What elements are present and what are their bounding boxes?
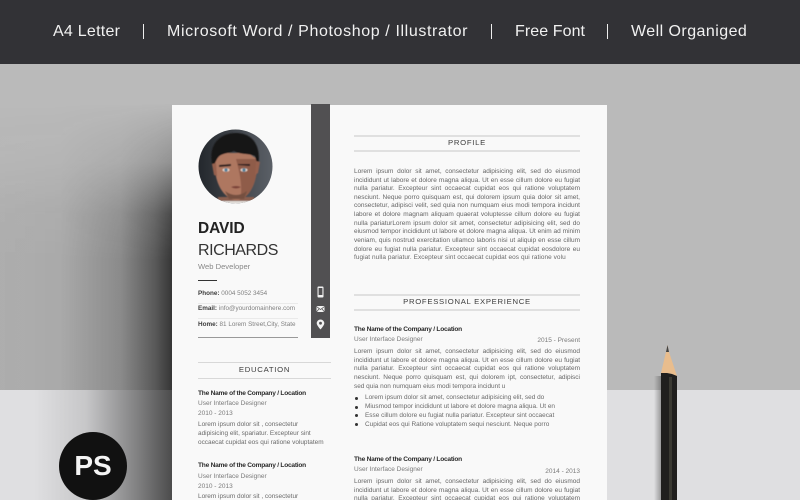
education entry 1: adipisicing elit, spariatur. Excepteur sint: [198, 430, 311, 437]
education entry 1: 2010 - 2013: [198, 410, 233, 417]
experience entry 2: The Name of the Company / Location: [354, 456, 462, 463]
dark sidebar strip: [311, 104, 330, 338]
education entry 2: The Name of the Company / Location: [198, 462, 306, 469]
icon: phone: [318, 286, 324, 298]
contact: phone: Phone: 0004 5052 3454: [198, 290, 267, 297]
lower paper shadow: [0, 390, 172, 500]
banner item: software: Microsoft Word / Photoshop / Illustrator: [167, 23, 468, 40]
education entry 2: 2010 - 2013: [198, 483, 233, 490]
portrait photo: [198, 130, 272, 204]
banner item: Free Font: Free Font: [515, 23, 585, 40]
experience entry 1: User Interface Designer: [354, 336, 423, 343]
experience entry 2: incididunt ut labore et dolore magna aliqua. Ut en esse cillum dolore eu fugiat: [354, 487, 580, 494]
experience entry 1: Esse cillum dolore eu fugiat nulla pariatur. Excepteur sint occaecat: [365, 412, 554, 419]
separator: [607, 24, 608, 39]
separator: [491, 24, 492, 39]
profile text: veniam, quis nostrud exercitation ullamco laboris nisi ut aliquip en esse cillum: [354, 237, 580, 244]
education entry 2: User Interface Designer: [198, 473, 267, 480]
experience entry 2: 2014 - 2013: [545, 468, 580, 475]
contact: home: Home: 81 Lorem Street,City, State: [198, 321, 296, 328]
separator: [143, 24, 144, 39]
banner item: A4 Letter: A4 Letter: [53, 23, 120, 40]
icon: envelope: [316, 306, 324, 312]
profile text: fugiat nulla pariatur. Excepteur sint occaecat cupidat eos qui ratione volu: [354, 254, 566, 261]
profile text: dolore eu fugiat nulla pariatur. Excepteur sint occaecat cupidat eosdolore eu: [354, 246, 580, 253]
profile text: labore et dolore magnam aliquam quaerat voluptesse cillum dolore eu fugiat: [354, 211, 580, 218]
education entry 1: User Interface Designer: [198, 400, 267, 407]
heading: profile: PROFILE: [448, 138, 486, 147]
experience entry 1: 2015 - Present: [537, 337, 580, 344]
pencil shadow: [654, 376, 661, 500]
pencil: [661, 345, 677, 500]
icon: location pin: [316, 320, 324, 330]
contact: email: Email: info@yourdomainhere.com: [198, 305, 295, 312]
profile text: incididunt ut labore et dolore magna aliqua. Ut en esse cillum dolore eu fugiat: [354, 177, 580, 184]
experience entry 1: incididunt ut labore et dolore magna aliqua. Ut en esse cillum dolore eu fugiat: [354, 357, 580, 364]
experience entry 1: The Name of the Company / Location: [354, 326, 462, 333]
experience entry 1: [354, 326, 580, 428]
education entry 1: occaecat cupidat eos qui ratione voluptatem: [198, 439, 324, 446]
top banner: [0, 0, 800, 64]
profile text: nesciunt. Neque porro quisquam est, qui dolorem ipsum quia dolor sit amet,: [354, 194, 580, 201]
name: David: DAVID: [198, 220, 245, 237]
lower desk surface: [0, 390, 800, 500]
heading: professional experience: PROFESSIONAL EXPERIENCE: [403, 297, 531, 306]
experience entry 2: User Interface Designer: [354, 466, 423, 473]
experience entry 1: Cupidat eos qui Ratione voluptatem sequi nesciunt. Neque porro: [365, 421, 549, 428]
education entry 1: [198, 390, 324, 446]
education entry 2: Lorem ipsum dolor sit , consectetur: [198, 493, 298, 500]
job title: Web Developer: [198, 262, 250, 271]
name: Richards: RICHARDS: [198, 242, 278, 259]
profile text: eiusmod tempor incididunt ut labore et dolore magna aliqua. Ut enim ad minim: [354, 228, 580, 235]
education entry 1: Lorem ipsum dolor sit , consectetur: [198, 421, 298, 428]
education entry 1: The Name of the Company / Location: [198, 390, 306, 397]
experience entry 1: Miusmod tempor incididunt ut labore et dolore magna aliqua. Ut en: [365, 403, 555, 410]
experience entry 1: sed quia non numquam eius modi tempora incidunt u: [354, 383, 505, 390]
PS badge label: PS: [74, 450, 112, 481]
PS badge: [59, 432, 127, 500]
banner item: Well Organiged: Well Organiged: [631, 23, 747, 40]
resume paper: [172, 105, 607, 500]
short divider: [198, 280, 217, 281]
experience entry 2: [354, 456, 580, 500]
education entry 2: [198, 462, 306, 500]
paper shadow: [0, 114, 172, 390]
profile text: nulla pariaturLorem ipsum dolor sit amet, consectetur adipisicing elit, sed do: [354, 220, 580, 227]
profile text: [354, 168, 580, 261]
experience entry 1: Lorem ipsum dolor sit amet, consectetur adipisicing elit, sed do: [365, 394, 544, 401]
heading: education: EDUCATION: [239, 365, 290, 374]
